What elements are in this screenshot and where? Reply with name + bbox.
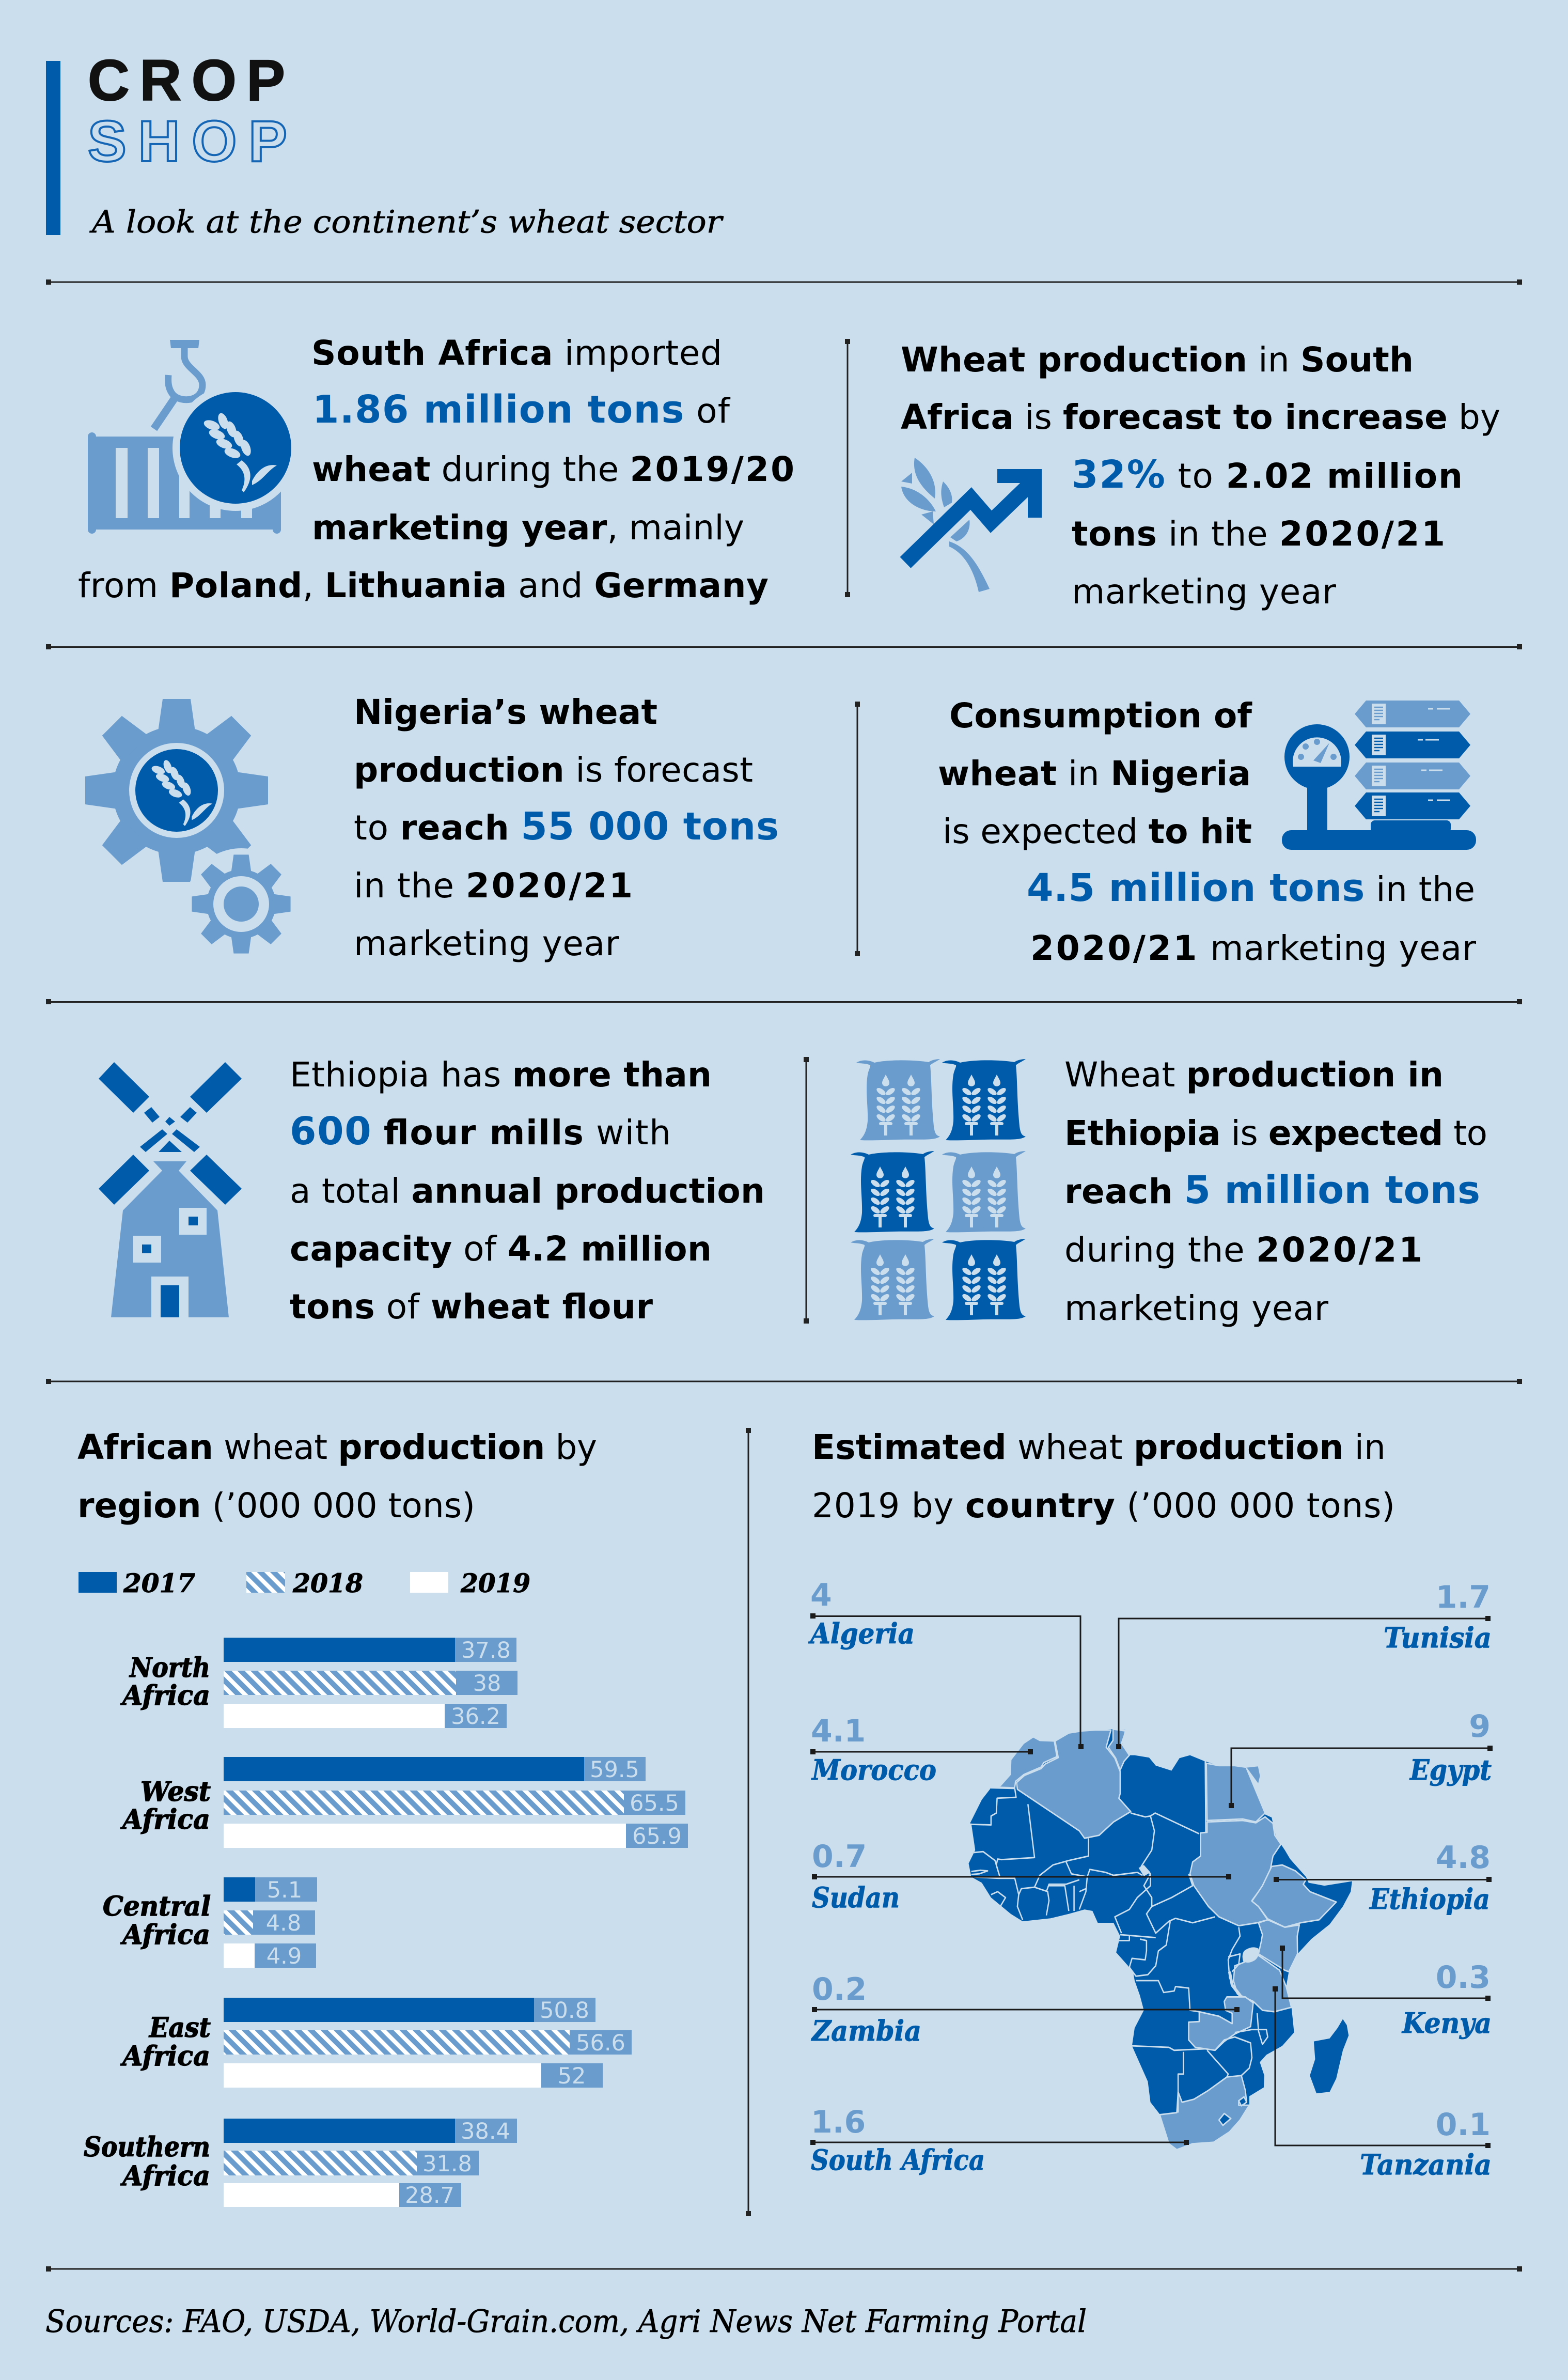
text: Nigeria production: in the 2020/21 [354,866,634,906]
bar values: 65.9 [632,1824,682,1849]
region labels: Africa [120,1804,210,1835]
map heading [812,1427,1395,1526]
legend [79,1568,530,1598]
sources: Sources: FAO, USDA, World-Grain.com, Agri News Net Farming Portal [45,2304,1087,2340]
text: Nigeria production: marketing year [354,924,620,963]
bar values: 56.6 [576,2030,625,2056]
bar values: 65.5 [630,1791,679,1816]
leader lines [813,1616,1490,2145]
country names: Kenya [1401,2006,1492,2040]
text: Ethiopia production: Ethiopia is expected to [1064,1113,1487,1153]
country values: 4.1 [811,1713,866,1749]
2017 bars [224,1638,584,2143]
text: Nigeria production: Nigeria’s wheat [354,692,657,732]
region labels: East [148,2012,211,2044]
Rift lakes [1230,1972,1241,1996]
text: South Africa forecast: Africa is forecast to increase by [901,397,1500,437]
text: Nigeria consumption: 2020/21 marketing year [1030,928,1477,968]
text: Nigeria consumption: wheat in Nigeria [938,754,1251,794]
2018 bars [224,1671,624,2175]
country names: Zambia [811,2014,921,2047]
text: South Africa forecast: tons in the 2020/21 [1072,514,1447,554]
region labels: Central [103,1891,211,1922]
country values: 1.7 [1436,1579,1491,1615]
Madagascar [1310,2019,1349,2093]
text: Ethiopia production: during the 2020/21 [1064,1230,1424,1270]
map heading: 2019 by country (’000 000 tons) [812,1486,1395,1526]
Lesotho and Swaziland [1219,2097,1247,2125]
title accent bar [46,61,60,235]
text: South Africa imports: wheat during the 2019/20 [312,449,796,489]
country names [808,1617,1492,2181]
text: Ethiopia flour mills: Ethiopia has more than [290,1055,712,1095]
title block [46,48,724,240]
text: Nigeria consumption [938,696,1477,968]
2019 bars [224,1704,626,2207]
text: South Africa forecast: marketing year [1072,572,1337,612]
title: SHOP outlined: SHOP [88,109,287,174]
icon: scale with sacks [1282,701,1476,850]
country values: 1.6 [811,2104,866,2140]
map of Africa [969,1729,1352,2150]
text: Nigeria consumption: is expected to hit [943,812,1252,851]
region labels: North [129,1652,210,1684]
country values: 0.7 [812,1839,867,1875]
bar values [266,1638,682,2208]
region labels: Africa [120,1919,210,1951]
country names: Egypt [1409,1753,1492,1786]
text: Ethiopia flour mills: tons of wheat flour [290,1287,653,1327]
region labels [84,1652,211,2192]
text: Ethiopia flour mills: capacity of 4.2 million [290,1229,712,1269]
region labels: Africa [120,2041,210,2072]
map panel: production by country [808,1427,1493,2181]
subtitle: A look at the continent’s wheat sector [89,204,724,240]
country values: 0.1 [1436,2107,1491,2143]
country names: Morocco [811,1753,936,1786]
text: Ethiopia production [1064,1055,1487,1328]
highlighted countries [991,1729,1336,2150]
text: South Africa forecast: 32% to 2.02 million [1072,453,1463,497]
country names: Algeria [808,1617,915,1650]
icon: wheat and rising arrow [901,458,1042,592]
Africa silhouette [969,1729,1352,2150]
text: Ethiopia production: marketing year [1064,1288,1329,1328]
bar values: 52 [558,2063,586,2089]
country values [810,1577,1491,2143]
country names: Tunisia [1384,1621,1492,1654]
bar values: 4.9 [266,1943,302,1969]
title: CROP: CROP [88,48,285,113]
text: South Africa imports: marketing year, mainly [312,508,744,548]
bar values: 28.7 [405,2183,454,2208]
map heading: Estimated wheat production in [812,1427,1386,1467]
text: Nigeria production [354,692,779,963]
text: South Africa imports: from Poland, Lithuania and Germany [78,566,769,605]
country borders [971,1761,1268,2112]
country values: 4.8 [1436,1840,1491,1876]
text: South Africa imports [78,333,796,605]
country values: 0.2 [812,1971,867,2008]
chart heading: African wheat production by [77,1427,597,1467]
bar values: 38 [473,1671,501,1697]
value label boxes [253,1638,688,2207]
icon: container with crane hook [88,340,299,534]
bar chart: production by region [77,1427,688,2208]
bar values: 59.5 [590,1757,639,1783]
chart heading: region (’000 000 tons) [77,1486,475,1526]
country names: Tanzania [1360,2148,1492,2181]
Lake Victoria [1243,1947,1259,1963]
bar values: 31.8 [422,2151,472,2177]
text: South Africa imports: 1.86 million tons of [312,387,731,432]
chart heading [77,1427,597,1526]
legend: 2018 [292,1568,363,1598]
text: Nigeria consumption: 4.5 million tons in the [1027,866,1475,910]
country values: 0.3 [1436,1959,1491,1996]
text: Nigeria production: to reach 55 000 tons [354,804,779,849]
bar values: 38.4 [461,2119,510,2144]
text: Ethiopia flour mills: 600 flour mills with [290,1109,671,1154]
region labels: Africa [120,2160,210,2192]
bar values: 4.8 [266,1910,301,1936]
region labels: Africa [120,1680,210,1712]
country names: South Africa [811,2143,985,2176]
icon: wheat sacks [851,1059,1026,1320]
text: South Africa forecast [901,340,1500,612]
country names: Sudan [812,1881,900,1914]
legend: 2019 [460,1568,530,1598]
text: Ethiopia production: Wheat production in [1064,1055,1444,1095]
text: Nigeria consumption: Consumption of [949,696,1252,736]
dividers [46,279,1522,2272]
bar values: 36.2 [451,1704,500,1730]
region labels: Southern [84,2132,210,2163]
country names: Ethiopia [1369,1883,1490,1916]
text: Ethiopia production: reach 5 million tons [1064,1168,1480,1212]
text: Ethiopia flour mills [290,1055,765,1327]
region labels: West [140,1776,211,1808]
text: South Africa imports: South Africa imported [311,333,722,373]
country values: 4 [810,1577,832,1613]
Lake Chad [1139,1865,1151,1876]
leader markers [810,1613,1493,2148]
text: South Africa forecast: Wheat production in South [901,340,1414,380]
icon: windmill [99,1062,242,1317]
bar values: 50.8 [540,1998,589,2024]
bar values: 37.8 [461,1638,511,1663]
legend: 2017 [123,1568,195,1598]
country values: 9 [1469,1708,1491,1745]
icon: gears with wheat [85,699,297,960]
bar values: 5.1 [267,1877,302,1903]
text: Ethiopia flour mills: a total annual production [290,1171,765,1211]
text: Nigeria production: production is forecast [354,750,753,790]
